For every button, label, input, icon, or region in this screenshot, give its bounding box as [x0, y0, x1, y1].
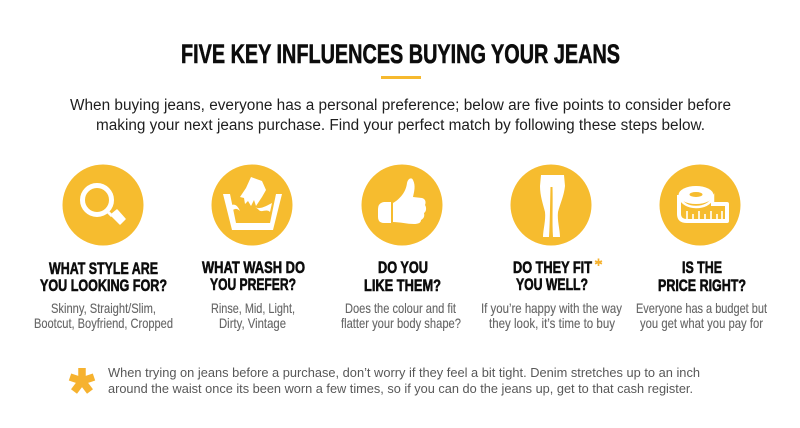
description	[211, 300, 295, 331]
heading: YOU PREFER?	[210, 276, 296, 294]
description: Bootcut, Boyfriend, Cropped	[34, 315, 173, 331]
description: Skinny, Straight/Slim,	[51, 300, 156, 316]
panel: like	[341, 164, 461, 331]
icon: thumbs up	[362, 164, 442, 246]
heading	[202, 259, 305, 294]
intro text	[70, 97, 731, 134]
heading: DO THEY FIT	[513, 259, 592, 277]
heading	[40, 260, 167, 295]
panel: price	[636, 164, 767, 331]
heading	[364, 259, 441, 295]
icon: leggings	[510, 164, 592, 246]
title: FIVE KEY INFLUENCES BUYING YOUR JEANS	[181, 39, 620, 69]
footnote text	[108, 366, 700, 396]
heading: WHAT WASH DO	[202, 259, 305, 277]
heading	[658, 259, 746, 295]
panel: style	[34, 164, 173, 331]
footnote text: When trying on jeans before a purchase, don’t worry if they feel a bit tight. Denim stretches up to an inch	[108, 366, 700, 380]
asterisk marker	[595, 258, 602, 266]
intro text: When buying jeans, everyone has a personal preference; below are five points to consider before	[70, 97, 731, 114]
panel: wash	[202, 164, 305, 331]
icon: tape measure	[660, 164, 740, 246]
description: Dirty, Vintage	[219, 315, 286, 331]
description	[481, 300, 622, 331]
description: Everyone has a budget but	[636, 300, 767, 316]
description: Rinse, Mid, Light,	[211, 300, 295, 316]
title underline	[381, 76, 421, 79]
intro text: making your next jeans purchase. Find your perfect match by following these steps below.	[96, 117, 705, 134]
heading: YOU LOOKING FOR?	[40, 277, 167, 295]
description: Does the colour and fit	[345, 300, 456, 316]
heading: DO YOU	[378, 259, 428, 277]
description	[341, 300, 461, 331]
heading: IS THE	[682, 259, 722, 277]
description: If you’re happy with the way	[481, 300, 622, 316]
heading: WHAT STYLE ARE	[49, 260, 158, 278]
description: you get what you pay for	[640, 315, 763, 331]
description: flatter your body shape?	[341, 315, 461, 331]
description	[34, 300, 173, 331]
icon: wash tub with hand	[212, 164, 292, 246]
heading: PRICE RIGHT?	[658, 277, 746, 295]
footnote text: around the waist once its been worn a few times, so if you can do the jeans up, get to that cash register.	[108, 382, 693, 396]
heading: LIKE THEM?	[364, 277, 441, 295]
description	[636, 300, 767, 331]
heading: YOU WELL?	[516, 276, 588, 294]
description: they look, it’s time to buy	[489, 315, 615, 331]
icon: large asterisk	[70, 368, 94, 392]
heading	[513, 259, 592, 294]
panel: fit	[481, 164, 622, 331]
icon: magnifying glass	[62, 164, 144, 246]
